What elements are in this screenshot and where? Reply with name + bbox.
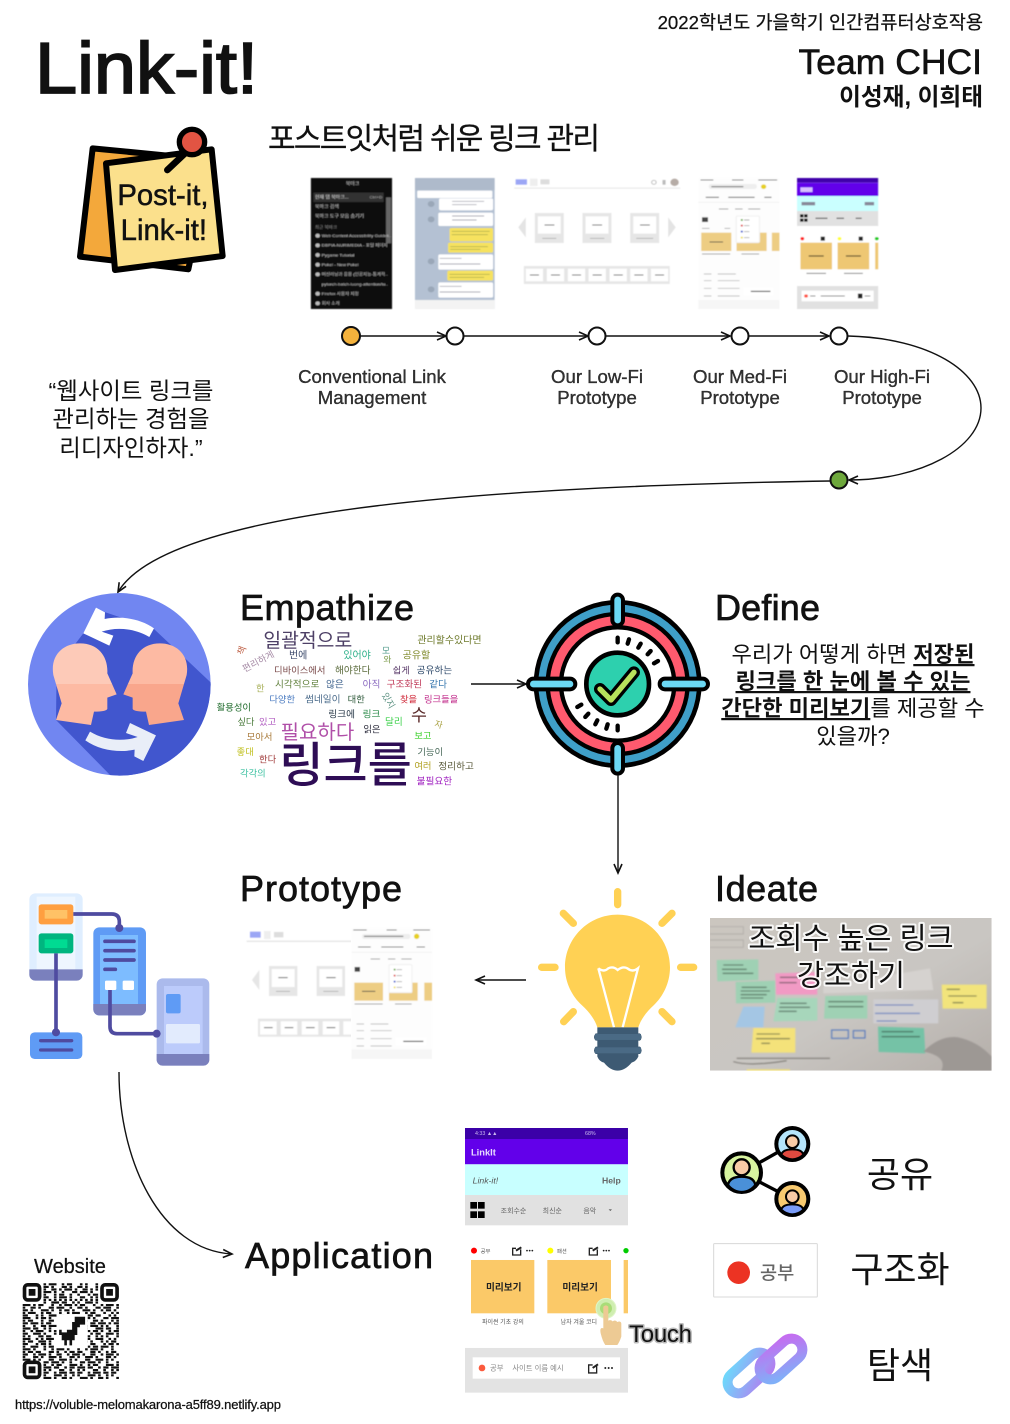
arrow: ideate to prototype [476, 979, 526, 981]
photo caption: 조회수 높은 링크 [748, 922, 954, 955]
word cloud: 디바이스에서 [274, 662, 325, 676]
timeline labels: Our High-Fi [834, 366, 930, 387]
app screenshot: 음악 [583, 1207, 597, 1215]
screenshot: browser bookmarks: Pokel - New Pokel [322, 262, 359, 267]
team name: Team CHCI [799, 42, 982, 82]
quote: 리디자인하자.” [59, 435, 203, 461]
quote: “웹사이트 링크를 [49, 378, 213, 404]
screenshot: high-fi [797, 178, 879, 309]
icon: two heads empathy [28, 593, 213, 778]
timeline node: low-fi [446, 328, 464, 344]
icon: light bulb [542, 892, 694, 1071]
heading: Empathize: Empathize [240, 587, 414, 628]
timeline labels: Our Low-Fi [551, 366, 643, 387]
word cloud: 링크들을 [424, 692, 459, 706]
photo caption [748, 922, 954, 992]
ideate photo [710, 918, 992, 1073]
word cloud: 시각적으로 [275, 677, 320, 691]
word cloud [217, 625, 482, 796]
heading: Prototype: Prototype [240, 868, 402, 909]
word cloud: 대한 [348, 692, 365, 706]
word cloud: 읽은 [363, 721, 381, 735]
word cloud: 링크 [363, 707, 381, 721]
arrow: curve to green node [848, 336, 981, 480]
define question [721, 642, 985, 749]
icon: post-it note: Link-it! [121, 214, 207, 247]
website label: Website [34, 1256, 106, 1278]
app screenshot: Link-it! [473, 1175, 499, 1185]
icon: target check [533, 600, 703, 768]
word cloud: 각각의 [240, 766, 266, 780]
timeline labels: Our Med-Fi [693, 366, 787, 387]
QR finder squares [25, 1285, 117, 1377]
screenshot: chat [415, 178, 495, 309]
word cloud: 와 [383, 653, 391, 665]
word cloud: 불필요한 [417, 773, 452, 787]
wireframe: med-fi [698, 178, 779, 309]
word cloud: 수 [411, 701, 427, 726]
green node [830, 472, 848, 488]
word cloud: 썸네일이 [305, 692, 341, 706]
app screenshot: LinkIt [471, 1147, 496, 1157]
app screenshot: 최신순 [543, 1206, 563, 1215]
icon: chain link [723, 1334, 807, 1398]
word cloud: 모아서 [247, 729, 272, 743]
screenshot: browser bookmarks: 현재 탭 북마크... [315, 194, 349, 201]
define question: 링크를 한 눈에 볼 수 있는 [736, 669, 970, 694]
word cloud: 않은 [326, 677, 344, 691]
label: structure: 구조화 [850, 1249, 950, 1290]
icon: post-it note [80, 129, 223, 270]
touch hand [596, 1298, 621, 1345]
app screenshot: 68% [585, 1131, 596, 1137]
word cloud: 편리하게 [239, 647, 276, 675]
team members: 이성재, 이희태 [839, 84, 983, 111]
word cloud: 있어야 [343, 646, 371, 661]
word cloud: 자 [433, 718, 444, 731]
word cloud: 있지 [379, 690, 399, 711]
icon: prototype flow [29, 893, 209, 1066]
word cloud: 모 [382, 644, 390, 656]
screenshot: browser bookmarks: 회사 소개 [322, 300, 340, 307]
word cloud: 찾을 [400, 692, 418, 706]
arrow: empathize to define [471, 683, 526, 685]
timeline labels: Management [318, 387, 427, 408]
title: Link-it! [35, 29, 258, 109]
timeline node: conventional [342, 327, 360, 345]
app screenshot: 미리보기 [562, 1282, 598, 1294]
screenshot: browser bookmarks: 북마크 검색 [315, 203, 339, 210]
screenshot: browser bookmarks: 북마크 도구 모음 숨기기 [315, 213, 364, 220]
timeline node: end [830, 328, 848, 344]
word cloud: 있고 [259, 714, 277, 728]
word cloud: 기능이 [417, 744, 443, 758]
icon: people sharing [722, 1128, 808, 1215]
word cloud: 필요하다 [281, 716, 354, 745]
word cloud: 관리할수있다면 [417, 632, 482, 647]
arrow: define to ideate [617, 775, 619, 873]
word cloud: 다양한 [269, 692, 295, 706]
touch label: Touch [629, 1321, 692, 1348]
med-fi wireframe [352, 928, 432, 1059]
timeline [342, 327, 848, 345]
low-fi wireframe [247, 931, 360, 1037]
QR code [23, 1284, 119, 1378]
app screenshot: 남자 겨울 코디 [561, 1318, 597, 1326]
tag chip: 공부 [760, 1263, 794, 1284]
subtitle: 포스트잇처럼 쉬운 링크 관리 [268, 123, 600, 156]
word cloud: 한다 [259, 751, 277, 765]
tag chip [714, 1244, 817, 1297]
heading: Application: Application [245, 1235, 433, 1276]
app screenshot: 4:33 ▲▲ [475, 1131, 497, 1137]
app screenshot: 공부 [481, 1248, 491, 1255]
screenshot: browser bookmarks [311, 178, 392, 309]
app screenshot: 조회수순 [501, 1207, 527, 1215]
app screenshot: 미리보기 [486, 1282, 522, 1294]
word cloud: 쉽게 [393, 662, 410, 676]
screenshot: browser bookmarks: Web Content Accessibility Guideli.. [322, 233, 391, 238]
quote [49, 378, 213, 461]
label: explore: 탐색 [867, 1345, 933, 1386]
timeline labels: Prototype [700, 387, 780, 408]
right features [714, 1128, 817, 1398]
timeline labels: Prototype [557, 387, 637, 408]
word cloud: 링크에 [328, 707, 355, 721]
word cloud: 여러 [414, 758, 431, 772]
heading: Ideate: Ideate [715, 868, 818, 909]
app screenshot: 공부 [490, 1364, 504, 1373]
word cloud: 공유하는 [417, 662, 452, 676]
word cloud: 한 [256, 681, 265, 695]
screenshot: browser bookmarks: Pygame Tutorial [322, 253, 354, 257]
define question: 간단한 미리보기를 제공할 수 [721, 696, 985, 721]
quote: 관리하는 경험을 [52, 406, 210, 432]
app screenshot: 파이썬 기초 강의 [482, 1318, 524, 1326]
word cloud: 정리하고 [438, 759, 474, 773]
screenshot: browser bookmarks: Firefox 사용자 지정 [322, 290, 359, 297]
screenshot: browser bookmarks: Ctrl+D [370, 195, 382, 200]
app screenshot [465, 1128, 629, 1393]
timeline node: high-fi [732, 328, 748, 344]
timeline labels: Prototype [842, 387, 922, 408]
word cloud: 공유할 [403, 646, 430, 661]
prototype wireframes [247, 928, 432, 1059]
timeline node: med-fi [588, 328, 606, 344]
word cloud: 좋대 [237, 744, 254, 758]
label: share: 공유 [867, 1154, 933, 1195]
word cloud: 링크를 [279, 726, 412, 796]
screenshot: browser bookmarks: pytorch-batch-luong-attention/tu.. [322, 282, 388, 286]
word cloud: 아직 [363, 677, 380, 691]
define question: 우리가 어떻게 하면 저장된 [731, 642, 975, 667]
screenshot: browser bookmarks: DBPIA-NURIMEDIA - 포털 페이지 [322, 242, 388, 249]
arrow: prototype to application [119, 1072, 232, 1254]
word cloud: 보고 [414, 728, 432, 742]
app screenshot: Help [602, 1175, 621, 1185]
app screenshot: 패션 [557, 1247, 567, 1255]
timeline labels [298, 366, 930, 408]
screenshot: browser bookmarks: 머신러닝과 응용 (인공지능-통계적.. [322, 271, 388, 278]
screenshot: browser bookmarks: 최근 북마크 [315, 224, 337, 230]
wireframe: low-fi [514, 179, 680, 284]
word cloud: 같다 [429, 677, 447, 691]
screenshot: browser bookmarks: 북마크 [346, 180, 359, 187]
word cloud: 번에 [289, 646, 307, 661]
define question: 있을까? [816, 724, 890, 749]
word cloud: 달리 [385, 714, 403, 728]
arrow: curve to empathize [118, 481, 830, 592]
word cloud: 구조화된 [387, 677, 422, 691]
word cloud: 일괄적으로 [263, 625, 352, 653]
heading: Define: Define [715, 587, 820, 628]
word cloud: 활용성이 [217, 700, 251, 714]
word cloud: 책 [233, 644, 249, 657]
icon: dino [59, 1317, 85, 1345]
icon: post-it note: Post-it, [117, 179, 209, 212]
course name: 2022학년도 가을학기 인간컴퓨터상호작용 [658, 12, 983, 33]
photo caption: 강조하기 [797, 959, 905, 992]
website url: https://voluble-melomakarona-a5ff89.netlify.app [15, 1397, 281, 1412]
word cloud: 싶다 [237, 714, 255, 728]
timeline labels: Conventional Link [298, 366, 447, 387]
screenshots row [311, 178, 879, 309]
app screenshot: 사이트 이름 예시 [512, 1364, 564, 1373]
word cloud: 해야한다 [335, 662, 371, 676]
